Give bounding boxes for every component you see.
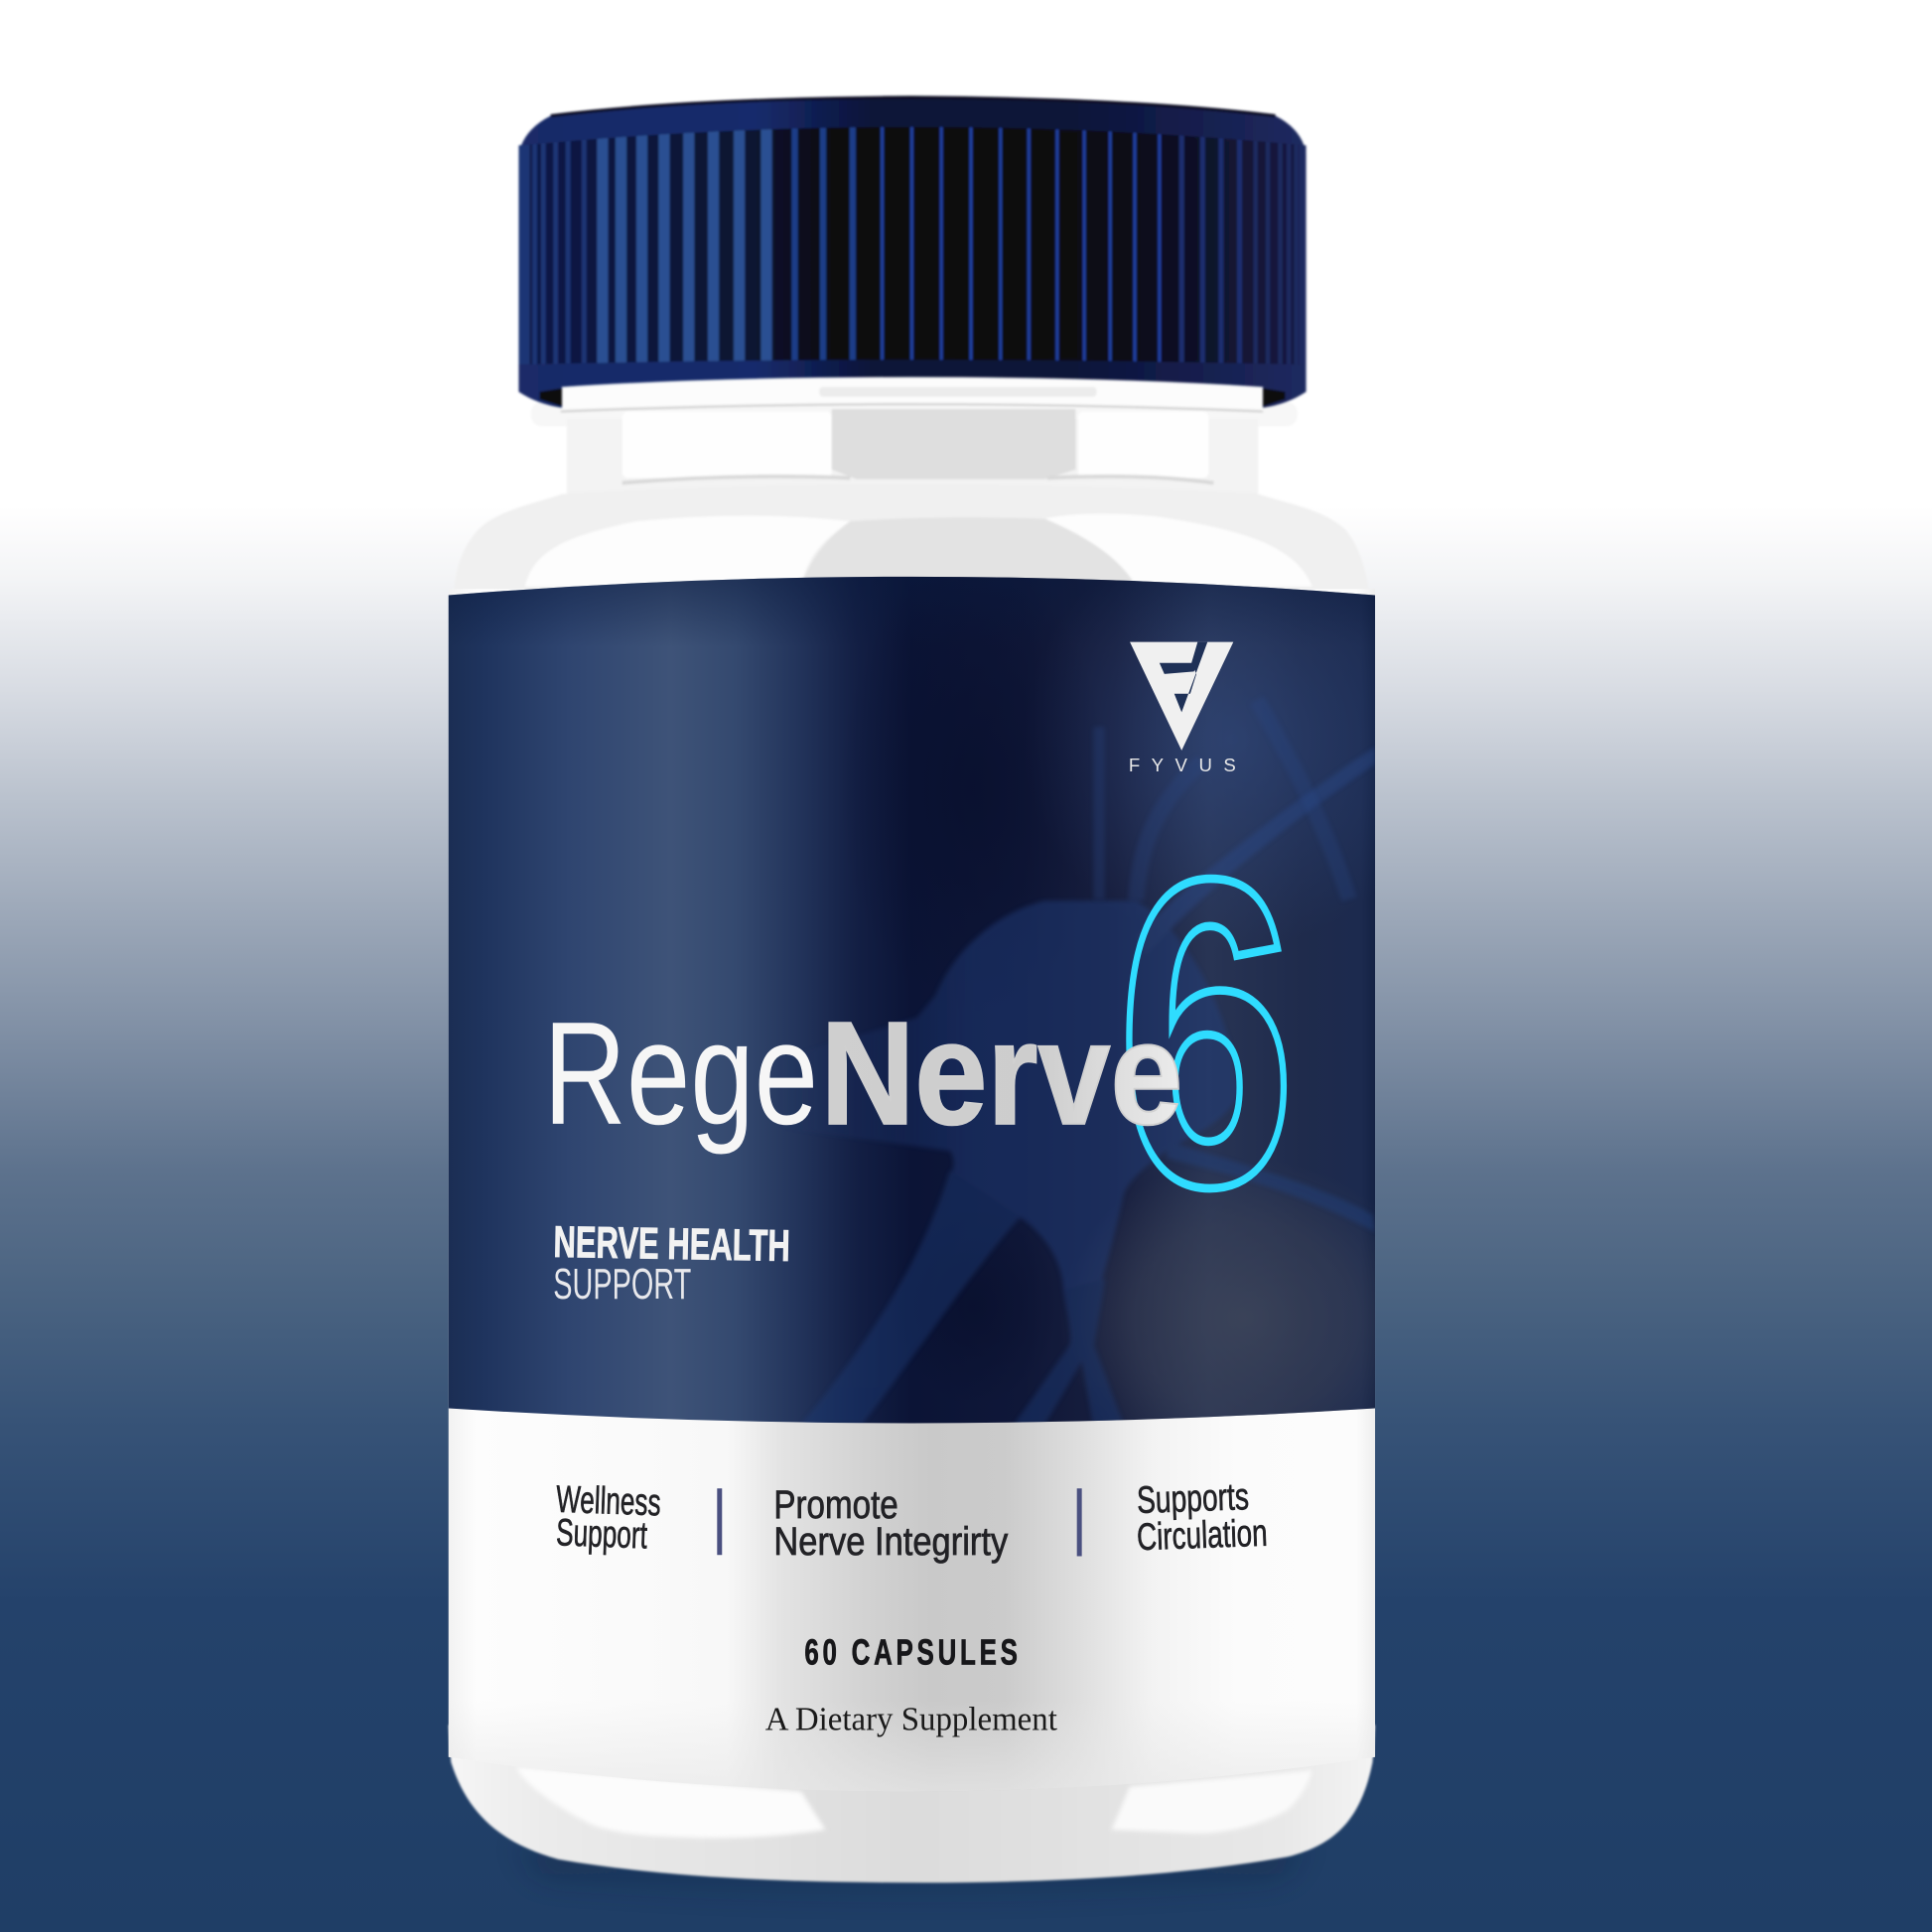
divider bar right <box>1077 1488 1082 1556</box>
navy label panel <box>449 576 1376 1424</box>
benefit: wellness support <box>555 1478 661 1558</box>
tagline: NERVE HEALTH <box>553 1218 790 1271</box>
capsule count: 60 CAPSULES <box>804 1633 1018 1673</box>
benefit: supports circulation: Supports <box>1136 1475 1250 1522</box>
benefit: wellness support: Wellness <box>555 1478 661 1524</box>
benefit: promote nerve integrity: Nerve Integrirty <box>773 1520 1008 1564</box>
ground shadow <box>517 1842 1307 1889</box>
bottle body and base <box>449 589 1375 1882</box>
benefit: promote nerve integrity <box>773 1483 1008 1564</box>
logo mark <box>1130 642 1233 751</box>
product name: Nerve <box>821 992 1182 1156</box>
brand name: FYVUS <box>1129 755 1236 775</box>
product name <box>543 992 1182 1156</box>
rounded base <box>449 1725 1375 1882</box>
tagline: SUPPORT <box>553 1261 691 1309</box>
dietary supplement line: A Dietary Supplement <box>765 1701 1058 1737</box>
tagline <box>553 1218 790 1309</box>
product name: Rege <box>543 992 818 1156</box>
cap <box>518 97 1308 408</box>
white label panel <box>449 589 1375 1792</box>
neuron illustration <box>449 577 1375 1424</box>
benefit: promote nerve integrity: Promote <box>773 1483 898 1527</box>
cyan outlined numeral 6: 6 <box>1118 788 1296 1277</box>
benefit: supports circulation <box>1136 1475 1268 1559</box>
divider bar left <box>717 1488 722 1555</box>
benefit: wellness support: Support <box>555 1511 648 1558</box>
brand logo <box>1129 642 1236 775</box>
benefit: supports circulation: Circulation <box>1136 1512 1268 1559</box>
bottle neck and shoulder <box>454 376 1370 597</box>
